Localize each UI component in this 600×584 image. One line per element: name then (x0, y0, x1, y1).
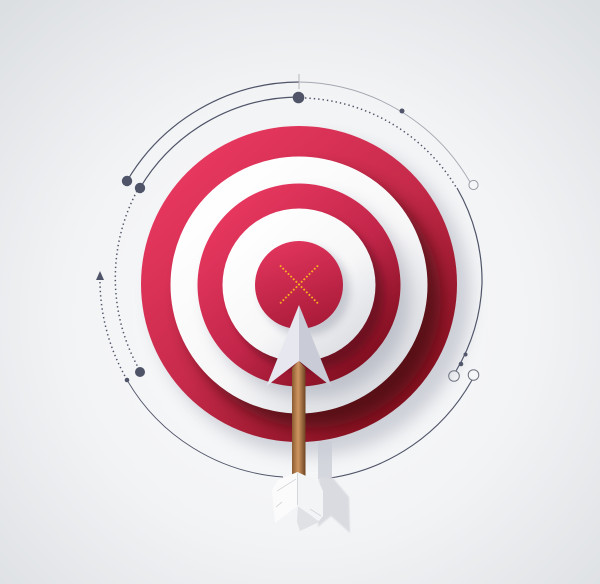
left vane (272, 472, 298, 523)
arc: lower right (330, 380, 472, 478)
solid arc: right side (456, 188, 482, 371)
dotted arc: upper right (305, 98, 456, 187)
bullseye x mark (280, 266, 318, 304)
bullseye (255, 241, 343, 329)
outer arc: upper left (127, 82, 299, 181)
inner red ring (198, 184, 400, 386)
lower centre vane (297, 504, 319, 531)
arrow shaft (292, 361, 306, 477)
arrow head (266, 305, 332, 387)
circuit lines: orbit decoration (100, 82, 482, 478)
dotted arc: left outer (100, 282, 126, 378)
right vane (298, 472, 323, 521)
arrow shadow on ground (318, 441, 350, 533)
arrow fletching (272, 472, 323, 531)
outer red ring (141, 126, 457, 442)
inner arc: upper left (140, 97, 298, 188)
dotted arc: left inner (115, 191, 139, 369)
inner white ring (222, 208, 376, 362)
circuit nodes (96, 74, 479, 382)
white ring (170, 156, 428, 414)
arc: lower left (127, 380, 283, 477)
outer arc: upper right (299, 82, 470, 182)
target shadow (151, 136, 471, 456)
feather lines (276, 473, 321, 516)
target board (141, 126, 457, 442)
